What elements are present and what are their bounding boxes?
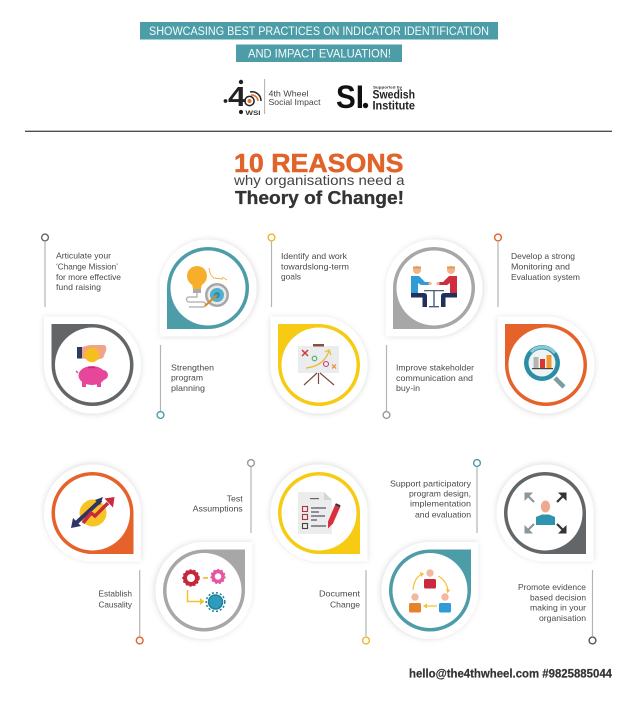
text 3: goals [281, 272, 301, 282]
text 6: Causality [98, 600, 133, 610]
teardrop 5 [498, 316, 594, 414]
reason 10: evidence based decision [409, 464, 613, 680]
logo: Swedish Institute: Swedish [372, 88, 415, 102]
text 1: for more effective [56, 272, 121, 282]
teardrop 2 [160, 240, 256, 336]
teardrop 7 [156, 542, 252, 639]
connector 7 [248, 460, 254, 533]
text 2: program [171, 373, 203, 383]
connector 10 [589, 570, 596, 644]
teardrop 3 [270, 316, 368, 414]
text 6: Establish [98, 589, 132, 599]
teardrop 4 [386, 240, 482, 336]
text 9: implementation [410, 499, 471, 509]
text 1: ‘Change Mission’ [56, 262, 118, 272]
connector 2 [157, 345, 164, 418]
connector 3 [268, 234, 275, 307]
text 2 [171, 362, 214, 393]
title: why organisations need a [233, 172, 405, 188]
text 5 [511, 251, 580, 282]
text 7: Test [227, 494, 243, 504]
teardrop 6 [44, 464, 141, 562]
text 9: Support participatory [390, 479, 472, 489]
text 1 [56, 250, 121, 292]
teardrop 8 [270, 464, 368, 562]
teardrop 10 [496, 464, 594, 562]
title [233, 150, 405, 208]
teardrop 9 [382, 542, 478, 639]
text 3 [281, 251, 349, 282]
title: 10 REASONS [234, 150, 404, 178]
text 10 [518, 582, 586, 623]
text 5: Evaluation system [511, 272, 580, 282]
logo: Swedish Institute: Supported by [373, 86, 403, 90]
icon: strategy board [298, 344, 339, 385]
banner: heading line two: AND IMPACT EVALUATION! [248, 48, 391, 60]
logo: 4th Wheel Social Impact [224, 79, 321, 117]
connector 1 [42, 234, 48, 307]
reason 1: fund raising [42, 234, 613, 680]
reason 8: document change [270, 460, 613, 680]
text 4: communication and [396, 373, 473, 383]
icon: checklist and pencil [298, 492, 340, 534]
text 7 [193, 494, 243, 514]
reason 9: participatory design [382, 460, 613, 680]
text 4: Improve stakeholder [396, 363, 474, 373]
logo: Swedish Institute: Institute [372, 98, 415, 112]
icon: causality arrows [71, 497, 114, 528]
teardrop 1 [44, 316, 141, 414]
text 9 [390, 479, 472, 520]
connector 8 [363, 570, 369, 644]
logo: 4th Wheel Social Impact: 4th Wheel [268, 88, 309, 98]
text 4 [396, 363, 474, 393]
text 6 [98, 589, 133, 610]
text 8: Document [319, 589, 361, 599]
text 1: fund raising [56, 282, 101, 292]
reason 5: monitoring and evaluation [44, 234, 613, 680]
text 10: based decision [530, 593, 586, 603]
text 10: organisation [539, 613, 586, 623]
icon: hand with coin and piggy bank [76, 345, 108, 387]
reason 3: long-term goals [44, 234, 613, 680]
icon: magnifier with bar chart [524, 345, 564, 387]
reason 2: program planning [44, 234, 613, 680]
text 9: and evaluation [415, 510, 471, 520]
icon: two people at table [411, 266, 457, 307]
icon: three people cycle [409, 569, 451, 612]
text 10: Promote evidence [518, 582, 586, 592]
text 5: Monitoring and [511, 262, 570, 272]
text 2: planning [171, 383, 205, 393]
text 4: buy-in [396, 383, 420, 393]
text 9: program design, [409, 489, 471, 499]
text 2: Strengthen [171, 362, 214, 372]
text 5: Develop a strong [511, 251, 575, 261]
connector 4 [383, 345, 390, 418]
reason 7: test assumptions [156, 460, 613, 680]
icon: gears [183, 570, 225, 611]
reason 6: causality [44, 460, 613, 680]
banner: heading line one [140, 22, 498, 40]
logo: 4th Wheel Social Impact: WSI [246, 110, 261, 117]
connector 5 [495, 234, 501, 307]
text 8: Change [330, 600, 360, 610]
connector 9 [474, 460, 480, 533]
title: Theory of Change! [235, 187, 404, 208]
text 3: towardslong-term [281, 262, 349, 272]
icon: person with four arrows [524, 492, 566, 534]
banner: heading line one: SHOWCASING BEST PRACTICES ON INDICATOR IDENTIFICATION [149, 26, 489, 38]
icon: bulb and target [186, 266, 229, 307]
text 10: making in your [530, 603, 586, 613]
text 3: Identify and work [281, 251, 348, 261]
text 7: Assumptions [193, 504, 243, 514]
text 1: Articulate your [56, 250, 111, 260]
logo: Swedish Institute [336, 79, 415, 115]
logo: 4th Wheel Social Impact: Social Impact [268, 97, 321, 107]
banner: heading line two [236, 44, 402, 62]
connector 6 [136, 570, 143, 644]
reason 4: stakeholder communication [44, 234, 613, 680]
logo: 4th Wheel Social Impact: 4 [228, 81, 246, 112]
text 8 [319, 589, 361, 610]
contact line: hello@the4thwheel.com #9825885044 [409, 668, 613, 680]
logo: Swedish Institute: SI [336, 79, 364, 115]
